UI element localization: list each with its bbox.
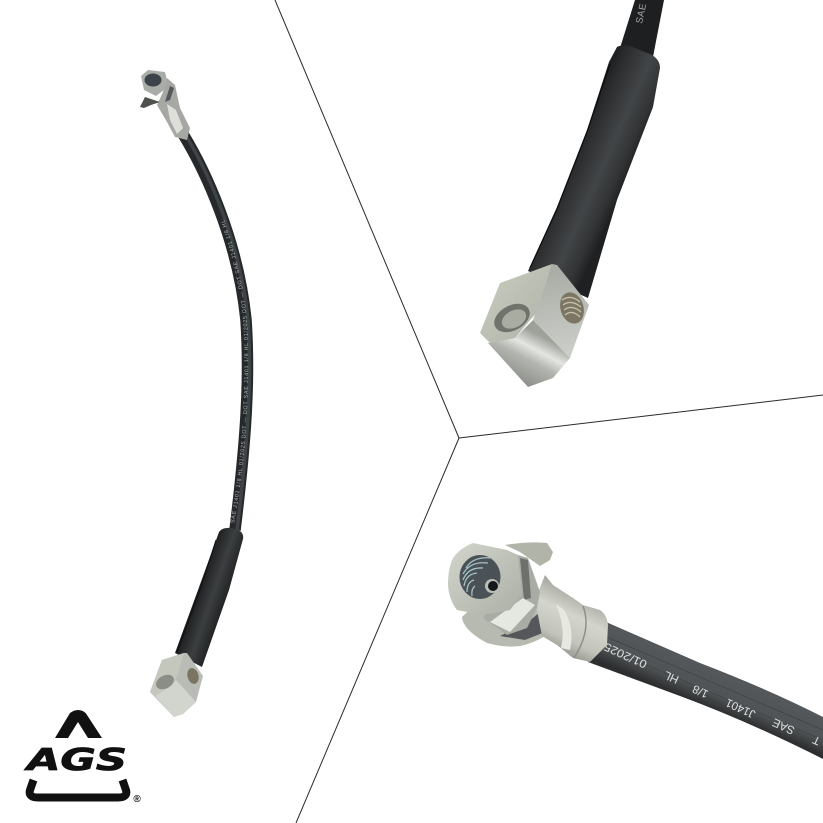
hose markings: SAE — [771, 715, 797, 736]
hose markings: T — [811, 733, 822, 747]
sleeve seam — [177, 540, 216, 652]
collar highlight — [556, 604, 572, 650]
lower washer — [462, 600, 548, 647]
registered mark: ® — [133, 794, 141, 805]
inner orifice — [485, 579, 499, 593]
block rounded band — [488, 320, 570, 387]
bore inner wall — [499, 305, 529, 333]
hose ribs — [593, 634, 823, 750]
port thread rings — [562, 297, 581, 317]
hose body — [183, 134, 248, 530]
collar shadow — [165, 86, 174, 102]
logo wordmark: AGS — [24, 743, 127, 778]
washer inner shadow — [500, 612, 553, 640]
hose sheen — [185, 134, 250, 530]
top fitting — [140, 70, 190, 140]
orifice hole — [488, 581, 498, 591]
hex nut face — [448, 543, 522, 615]
threaded bore — [460, 555, 500, 599]
block threaded port — [186, 667, 200, 685]
hex nut bright facet — [490, 598, 535, 632]
hose markings: 1/8 — [691, 682, 711, 700]
hose markings: HL — [662, 668, 681, 685]
panel: threaded fitting detail — [448, 542, 823, 759]
panel dividers — [275, 0, 823, 823]
hex nut side — [483, 555, 540, 635]
hose markings: 01/2025 — [602, 640, 649, 670]
block body — [150, 653, 203, 717]
block rounded band — [155, 680, 196, 717]
logo bottom bracket — [30, 780, 126, 798]
hose printed marking: SAE — [634, 2, 649, 25]
hose end — [620, 0, 664, 62]
hose printed marking: SAE J1401 1/8 HL 01/2025 DOT — DOT SAE J1401 1/8 HL 01/2025 DOT — DOT SAE J1401 1/8 HL — [221, 220, 248, 523]
bore thread rings — [463, 558, 492, 596]
logo: AGS — [24, 710, 141, 805]
mounting block detail — [480, 264, 589, 387]
logo top chevron — [55, 710, 102, 738]
clip tab — [140, 97, 160, 108]
crimp body — [157, 78, 190, 140]
hose — [588, 622, 823, 759]
hex nut — [141, 70, 167, 96]
block bolt hole — [154, 672, 176, 692]
mounting block — [150, 653, 203, 717]
upper clip tab — [505, 542, 553, 566]
heat shrink sleeve — [528, 45, 660, 298]
hose markings — [602, 640, 822, 747]
hex nut side stripe — [520, 558, 531, 600]
crimp collar — [535, 575, 608, 662]
threaded port — [556, 289, 588, 327]
protective sleeve — [175, 528, 243, 667]
collar groove — [574, 606, 586, 658]
block front face — [480, 264, 552, 343]
nut bore — [144, 74, 162, 86]
block face — [150, 653, 184, 696]
crimp highlights — [167, 104, 183, 134]
block side face — [533, 264, 589, 358]
panel: sleeve and block detail — [480, 0, 664, 387]
panel: full brake hose — [140, 70, 254, 717]
sleeve seam — [530, 64, 610, 268]
through bore — [489, 298, 535, 338]
hose markings: J1401 — [724, 696, 758, 720]
